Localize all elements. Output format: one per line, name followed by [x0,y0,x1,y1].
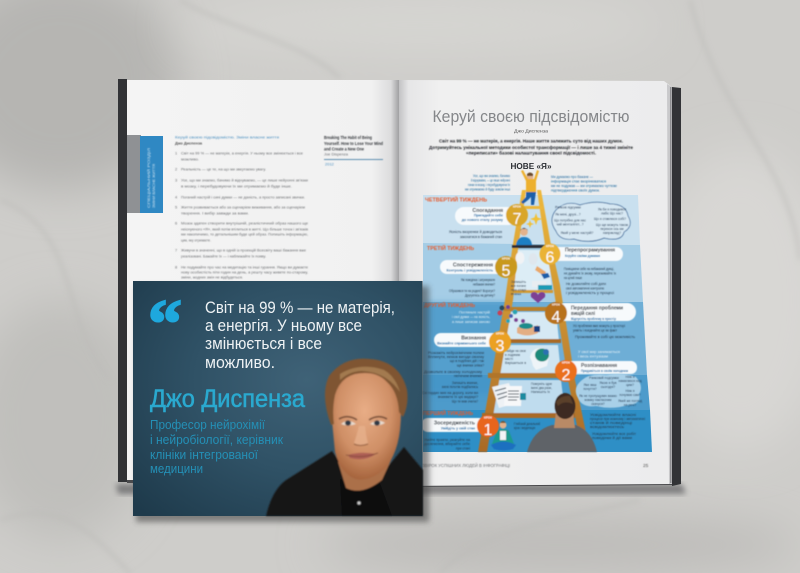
step 1 concentration: КРОК [484,416,492,420]
book summary text: 8 [175,264,177,270]
icon: papers: Поверніть одне [531,382,552,386]
thought cloud upper: Що я ставлюся собі? [594,217,626,221]
mouth [348,453,376,459]
icon: meditating person: крок і медитація [514,426,535,430]
step 7 remembering [449,204,528,239]
icon: head profile with brain [505,348,549,370]
thought cloud lower: сьогодні? [601,385,615,389]
icon: hand releasing dots [498,305,540,336]
book summary text: Поганий настрій і сині думки — не даність, а просто записані звички. [181,194,305,200]
icon: note and heart: вчинки [511,292,521,296]
step 4 surrender: У свої мир занимається [578,350,620,354]
thought cloud upper: Ранкові підсумки [555,206,581,210]
quote text: можливо. [205,354,275,372]
step 1 concentration: при стані [456,446,470,450]
step 6 reprogramming: свої автоматичні контролю [566,286,604,290]
step 6 reprogramming: КРОК [546,244,554,248]
text: lower right notes: всвідомлюєтесь [590,425,624,429]
icon: theatre masks [516,252,550,279]
text: lower right notes: Усвідомлюйте власні [590,413,636,417]
infographic ladder [421,170,652,452]
text: top right intro: підтвердження своїх думок. [551,188,600,192]
step 1 concentration: Умійте прияти, реагуйте на [424,438,470,442]
step 3 admission: Що ти мав очила? [452,400,478,404]
text: second week release [452,310,490,324]
book summary text: Мозок здатен створити внутрішній, реалістичний образ нашого ще [181,220,308,226]
thought cloud upper: Який у мене настрій? [561,231,594,235]
text: top left intro: гачки в мозку, і перебудовуючи їх [468,183,510,187]
week labels [423,196,487,417]
step 7 remembering: до нового етапу розуму [462,218,503,222]
step 2 recognition: 2 [562,367,571,384]
step 4 surrender: Передання проблеми [571,304,623,312]
step 1 concentration: досягнення, вбирайте себе [424,442,470,446]
author: Джо Диспенза [514,128,549,134]
book summary text: 6 [175,220,177,226]
step 5 observation: 5 [502,263,511,280]
blue chapter tab: СПЕЦІАЛЬНИЙ РОЗДІЛ [147,148,151,208]
author description: Професор нейрохімії [150,418,265,432]
text: top left intro: ми отримаємо й буду зовсім інші [465,188,510,192]
icon: meditating person [491,421,540,450]
icon: note and heart: про старі [511,288,526,292]
icon: man from behind [527,393,597,452]
step 3 admission: Вплинути, немов вигоди своєму [428,355,484,359]
thought cloud upper [552,202,630,241]
hair [325,359,408,425]
step 4 surrender: КРОК [552,302,560,306]
step 3 admission: Визнання [461,336,486,342]
card shadow [136,286,429,522]
thought cloud upper: лабіс Що нас? [601,212,623,216]
thought cloud lower: скачуся? [591,402,605,406]
icon: note and heart: все погане [511,284,526,288]
icon: meditating person: Глибокий дихальний [514,422,540,426]
thought cloud lower: Ніяк я [625,375,635,379]
step 5 observation: Образився ти на родині? Ворогує? [449,289,495,293]
face [331,369,401,479]
text: lower right notes: поведінки й дії вами [592,436,632,440]
icon: note and heart: Запишіть [511,280,526,284]
step 7 remembering: КРОК [513,204,521,208]
author description: і нейробіології, керівник [150,433,284,447]
book [116,79,686,494]
step 3 admission [422,331,511,404]
book summary text: Реальність — це те, на що ми звертаємо увагу. [181,166,266,172]
book summary text: творення. І вибір завжди за вами. [181,210,249,216]
thought cloud lower: намагаюся над [618,379,642,383]
step 4 surrender: вищій силі [571,310,595,317]
step 3 admission: Скі гордих мих на дорогу, коли ви [422,391,478,395]
book reference: and Create a New One [324,146,364,152]
thought cloud lower: почуття? [583,387,597,391]
page number: 25 [643,463,649,469]
panel: right page [399,80,672,486]
step 1 concentration: Увійдіть у свій стан [441,426,475,430]
step 4 surrender [545,302,636,358]
icon: papers: імені два рази, [531,386,552,390]
author description: медицини [150,462,203,476]
thought cloud lower: на речі? [624,403,636,407]
book summary text: 7 [175,248,177,252]
book summary text [175,134,308,280]
book summary text: Живучи в значенні, що в одній із проекцій Всесвіту ваші бажання вже [181,248,306,252]
thought cloud lower: Який же погляд [618,399,642,403]
thought cloud upper: Що ще можуть також [596,223,629,227]
step 3 admission: Визнайте справжнього себе [437,342,486,346]
quote text: змінюється і все [205,335,322,353]
text: top left intro: Усе, що ми знаємо, бачимо [473,174,510,178]
book summary text: Життя розвивається або за сценарієм виживання, або за сценарієм [181,204,305,210]
week labels: ДРУГИЙ ТИЖДЕНЬ [424,301,475,309]
portrait [266,359,423,516]
text: top left intro [465,174,510,192]
thought cloud upper: Що потрібно для нас [554,218,586,222]
icon: note and heart [511,280,552,303]
step 4 surrender: Проживайте в собі цю можливість [575,335,635,339]
step 6 reprogramming: 6 [546,250,555,266]
thought cloud lower: Якою я був [600,381,617,385]
book summary text: Не подумайте про час на медитацію та інші гурання. Якщо ви думаєте [181,264,308,270]
intro text: Дотримуйтесь унікальної методики особистої трансформації — і лише за 4 тижні змініте [429,144,633,150]
step 7 remembering: Пригадайте себе [474,214,503,218]
step 2 recognition: Придивіться в своїм холодним [581,369,628,373]
book summary text: Джо Диспенза [175,140,203,146]
book summary text: неіснуючого «Я», який потім втілиться в житті. Що більше точок і зв'язків [181,226,308,232]
step 3 admission: мені пілотів подбались [442,385,478,389]
step 3 admission: що в подібних дій і так [450,359,484,363]
eyes [341,421,385,426]
step 3 admission: 3 [496,338,505,355]
book reference: 2012 [325,162,335,166]
book summary text: 3 [175,178,177,182]
intro text: Світ на 99 % — не матерія, а енергія. Наше життя залежить суто від наших думок. [439,138,623,144]
step 2 recognition: Розпізнавання [581,363,617,369]
step 6 reprogramming [540,244,623,295]
step 5 observation: Які поведінка і затримували [461,278,495,282]
panel: quote card [133,281,423,516]
step 6 reprogramming: Перепрограмування [565,248,615,254]
nose [354,426,368,446]
step 4 surrender: Відпустіть проблему в простір [571,317,616,321]
book summary text: Світ на 99 % — не матерія, а енергія. У ньому все змінюється і все [181,150,303,156]
step 5 observation: небажані вчинки? [473,282,495,286]
book summary text: зміни, жодних змін не відбудеться. [181,274,243,280]
thought cloud lower: Ранковий подсумки [589,376,619,380]
book reference: Yourself. How to Lose Your Mind [324,141,383,146]
step 3 admission: Запишіть вчинки, [452,381,478,385]
icon: head profile with brain: в лодиним [505,353,521,357]
text: top left intro: й відчуваємо, — це лише нейронні [471,178,510,182]
step 6 reprogramming: і усвідомленість у процесі [566,291,614,295]
heading new self: НОВЕ «Я» [510,162,552,171]
icon: stars [526,213,542,228]
book reference: Breaking The Habit of Being [324,135,372,140]
icon: head profile with brain: Вирішиться в [505,361,526,365]
step 6 reprogramming: Поміщаючи себе на небажаний думці, [564,267,614,271]
step 6 reprogramming: Керуйте своїми думками [565,254,600,258]
thought cloud lower [576,374,642,408]
step 4 surrender: Усі проблеми вже можуть у просторі [573,324,625,328]
icon: head profile with brain: Увійди на своє [505,349,526,353]
title: Керуй своєю підсвідомістю [432,108,630,126]
thought cloud lower: Яке ваш [584,383,597,387]
neck [338,458,392,491]
book summary text: 5 [175,204,177,210]
thought cloud lower: Ніяк я [625,389,635,393]
book summary text: цим, яку отримаєте. [181,238,211,242]
thought cloud lower: цим? [626,383,634,387]
gray chapter tab [127,135,141,213]
thought cloud lower: Як не пропущувач важко [579,394,617,398]
blue chapter tab: ЗМІНИ ВЛАСНЕ ЖИТТЯ [152,163,156,208]
icon: top jumping person [521,170,539,205]
step 6 reprogramming: Не дозволяйте собі дати [566,282,606,286]
text: lower right notes: станів й поведінці [590,421,632,425]
step 1 concentration: 1 [484,422,493,439]
text: top right intro: ми не подумав — ми отримаємо чуттєве [551,184,617,188]
step 7 remembering: Ясність вкоренює й доводиться [449,230,502,234]
text: second week release: Погляньте настрій [459,310,490,314]
book reference: Joe Dispenza [324,152,349,156]
book summary text: 2 [175,166,177,172]
text: top right intro [551,175,617,192]
book summary text: ми накопичимо, то детальнішим буде цей образ. Попишіть інформацію, [181,232,308,236]
text: lower right notes [590,413,645,440]
step 5 observation: Спостереження [453,262,493,268]
book summary text: Керуй своєю підсвідомістю. Зміни власне життя [175,134,279,140]
quote text: а енергія. У ньому все [205,317,362,335]
step 3 admission: неічічим вчинки [454,374,482,378]
text: second week release: і свої думки — на ясність, [452,315,490,319]
book summary text: реалізовані. Бажайте їх — і наближайте їх появу. [181,254,266,258]
step 5 observation: КРОК [502,256,510,260]
text: top right intro: Ми думаємо про бажане — [551,175,593,179]
book reference [324,135,383,166]
thought cloud upper: Як мені, друзі...? [555,212,581,216]
blue chapter tab [140,136,163,213]
panel: left page [127,80,399,480]
step 3 admission: КРОК [496,332,504,336]
book summary text: 4 [175,194,178,200]
book summary text: в мозку, і перебудовуючи їх ми отримаємо й буде інше. [181,184,292,188]
icon: head profile with brain: місті [505,357,513,361]
step 5 observation: Контроль і усвідомленість [447,268,493,272]
intro text [429,138,633,156]
step 5 observation: Другуєтесь на дитину? [465,294,495,298]
thought cloud lower: почуваю сам? [619,393,641,397]
shirt [340,478,392,516]
thought cloud upper: перекон ось ми [600,227,624,231]
intro text: «переписати» базові налаштування своєї підсвідомості. [466,150,596,156]
book summary text: Усе, що ми знаємо, бачимо й відчуваємо, — це лише нейронні зв'язки [181,178,308,182]
step 3 admission: ще вчинки зліва? [457,364,484,368]
step 2 recognition: КРОК [562,360,570,364]
thought cloud upper: Як би я поводився [598,208,626,212]
step 1 concentration: Зосередженість [434,420,475,426]
step 7 remembering: 7 [513,211,522,228]
quote text [205,299,395,372]
step 5 observation [440,256,517,298]
step 6 reprogramming: на цілий лише [564,276,582,280]
book shadow [116,484,686,494]
text: top right intro: інформація стає вкорінюватися [551,180,606,184]
book summary text: нову особистість піти годин на день, а решту часу живете по-старому, [181,270,308,274]
week labels: ЧЕТВЕРТИЙ ТИЖДЕНЬ [425,196,487,204]
book summary text: можливо. [181,156,199,162]
ladder rungs [482,206,575,418]
step 4 surrender: і весь ентузіазм [578,354,609,358]
text: second week release: а лише записав заново [452,320,490,324]
thought cloud lower: мамку накласним [585,398,612,402]
step 3 admission: вчиняєте їх цю вадіарі? [438,395,478,399]
week labels: ПЕРШИЙ ТИЖДЕНЬ [423,409,473,417]
step 1 concentration [421,415,499,450]
icon: quotation mark: “ [148,285,182,361]
step 2 recognition [555,360,637,384]
step 4 surrender: уявіть і поєднайте це як факт [573,328,617,332]
author description: клініки інтегрованої [150,448,258,462]
step 3 admission: Розкажіть нейрохімічним полем [428,351,485,355]
page footer: ЗВІРОК УСПІШНИХ ЛЮДЕЙ В ІНФОГРАФІЦІ [422,463,510,468]
week bands [423,195,640,245]
book cover [118,79,681,486]
step 7 remembering: Спогадання [472,208,503,214]
scene panels between rungs [503,312,559,341]
thought cloud upper: наприклад? [603,231,621,235]
icon: person at desk [516,228,532,245]
ladder rails [478,190,526,452]
week labels: ТРЕТІЙ ТИЖДЕНЬ [427,244,474,252]
step 6 reprogramming: не думайте їх знову, переживайте їх [564,272,616,276]
step 3 admission: Дозвольте в своєму холодному [424,370,482,374]
icon: papers [492,382,552,408]
text: lower right notes: процеси при кожному і автоматичні [590,417,645,421]
book summary text: 1 [175,150,177,156]
author description [150,418,284,476]
step 4 surrender: 4 [552,309,561,326]
icon: papers: Напишіть їх [531,390,550,394]
jacket [266,447,423,516]
quote text: Світ на 99 % — не матерія, [205,299,395,317]
step 7 remembering: закохатися в бажаний стан [460,235,502,239]
author name: Джо Диспенза [150,385,305,413]
text: lower right notes: Усвідомлюйте все робіт [592,432,636,436]
thought cloud upper: чий менталітет...? [556,222,584,226]
